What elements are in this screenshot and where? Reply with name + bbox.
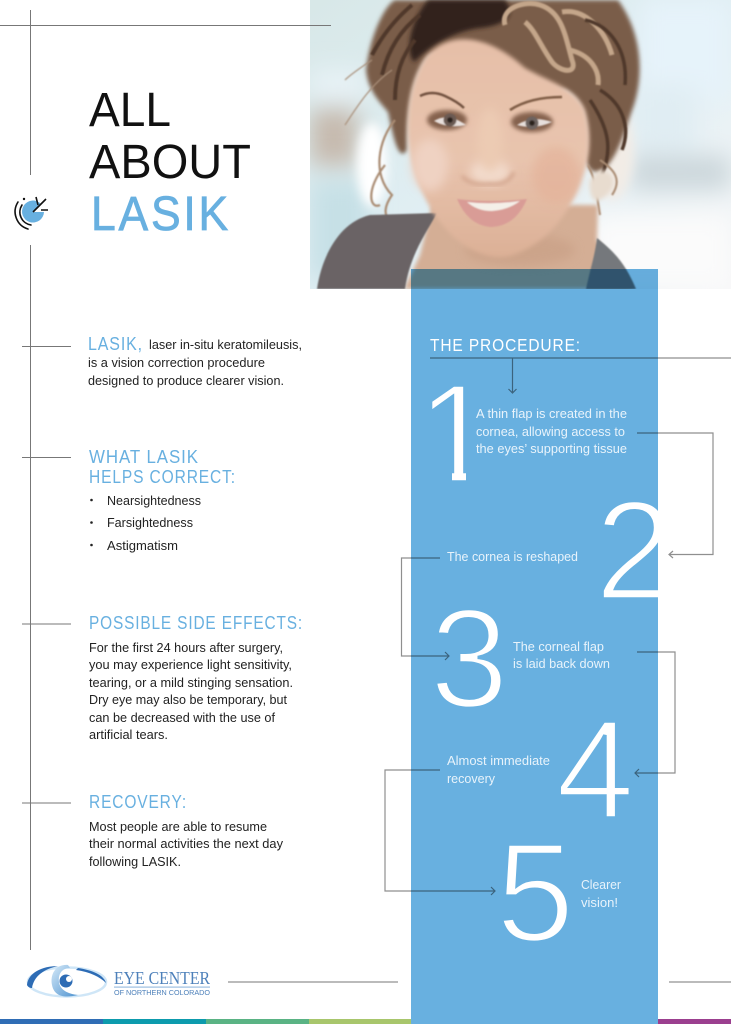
step 4: recovery xyxy=(447,771,495,786)
step 2: 2 xyxy=(595,471,673,629)
body text: their normal activities the next day xyxy=(89,836,283,851)
title: ABOUT xyxy=(89,136,251,189)
heading: THE PROCEDURE: xyxy=(430,335,581,355)
title: ALL xyxy=(89,84,171,137)
heading: WHAT LASIK xyxy=(89,447,199,467)
step 3: 3 xyxy=(430,579,508,737)
intro text block: designed to produce clearer vision. xyxy=(88,373,284,388)
logo eye mark xyxy=(27,965,106,997)
arrow: heading to step 1 xyxy=(430,358,731,393)
body text: Dry eye may also be temporary, but xyxy=(89,692,287,707)
step 3: is laid back down xyxy=(513,656,610,671)
body text: tearing, or a mild stinging sensation. xyxy=(89,675,293,690)
step 1: A thin flap is created in the xyxy=(476,406,627,421)
intro text block: LASIK, xyxy=(88,334,143,354)
step 5 xyxy=(496,813,622,971)
body text xyxy=(89,819,283,869)
step 3: The corneal flap xyxy=(513,639,604,654)
light halo around hair xyxy=(352,121,636,210)
section: possible side effects xyxy=(89,613,303,742)
body text: Most people are able to resume xyxy=(89,819,267,834)
arrow: step 2 to step 3 xyxy=(402,558,449,660)
logo wordmark xyxy=(114,968,210,997)
eyes and brows xyxy=(420,93,562,132)
step 1: 1 xyxy=(417,354,495,512)
step 3 xyxy=(430,579,610,737)
neck xyxy=(404,205,632,289)
heading: POSSIBLE SIDE EFFECTS: xyxy=(89,613,303,633)
step 1: cornea, allowing access to xyxy=(476,424,625,439)
logo: Eye Center of Northern Colorado xyxy=(27,965,210,997)
body text: For the first 24 hours after surgery, xyxy=(89,640,283,655)
step 4 xyxy=(447,690,634,848)
arrow: step 4 to step 5 xyxy=(385,770,495,895)
bullet list: Farsightedness xyxy=(107,515,193,530)
heading xyxy=(89,447,236,487)
body text: following LASIK. xyxy=(89,854,181,869)
heading: RECOVERY: xyxy=(89,792,187,812)
body text: can be decreased with the use of xyxy=(89,710,275,725)
title: LASIK xyxy=(91,188,231,241)
step 4: 4 xyxy=(556,690,634,848)
logo wordmark: EYE CENTER xyxy=(114,968,210,988)
bullet list: Astigmatism xyxy=(107,538,178,553)
title xyxy=(89,84,251,241)
bottom colour bar xyxy=(0,1019,731,1024)
face xyxy=(407,39,589,257)
section: what LASIK helps correct xyxy=(89,447,236,553)
body text xyxy=(89,640,293,742)
mouth xyxy=(457,199,527,227)
intro text block xyxy=(88,334,302,388)
step 5: vision! xyxy=(581,895,618,910)
logo wordmark: OF NORTHERN COLORADO xyxy=(114,988,210,997)
bullet list xyxy=(90,493,201,553)
panel: the procedure xyxy=(385,269,731,1024)
arrow: step 1 to step 2 xyxy=(637,433,713,558)
intro text block: laser in-situ keratomileusis, xyxy=(149,337,302,352)
section: recovery xyxy=(89,792,283,869)
body text: artificial tears. xyxy=(89,727,168,742)
step 5: 5 xyxy=(496,813,574,971)
body text: you may experience light sensitivity, xyxy=(89,657,292,672)
hair xyxy=(345,0,640,225)
step 4: Almost immediate xyxy=(447,753,550,768)
icon: laser targeting eye xyxy=(15,197,48,229)
step 1: the eyes’ supporting tissue xyxy=(476,441,627,456)
step 2: The cornea is reshaped xyxy=(447,549,578,564)
photo: smiling woman with curly hair xyxy=(310,0,731,289)
intro text block: is a vision correction procedure xyxy=(88,355,265,370)
nose xyxy=(462,172,514,184)
bullet list: Nearsightedness xyxy=(107,493,201,508)
step 1 xyxy=(432,386,626,480)
panel background xyxy=(411,269,658,1024)
shirt xyxy=(317,213,636,289)
heading: HELPS CORRECT: xyxy=(89,467,236,487)
step 2 xyxy=(447,502,658,598)
step 5: Clearer xyxy=(581,877,622,892)
arrow: step 3 to step 4 xyxy=(635,652,675,777)
